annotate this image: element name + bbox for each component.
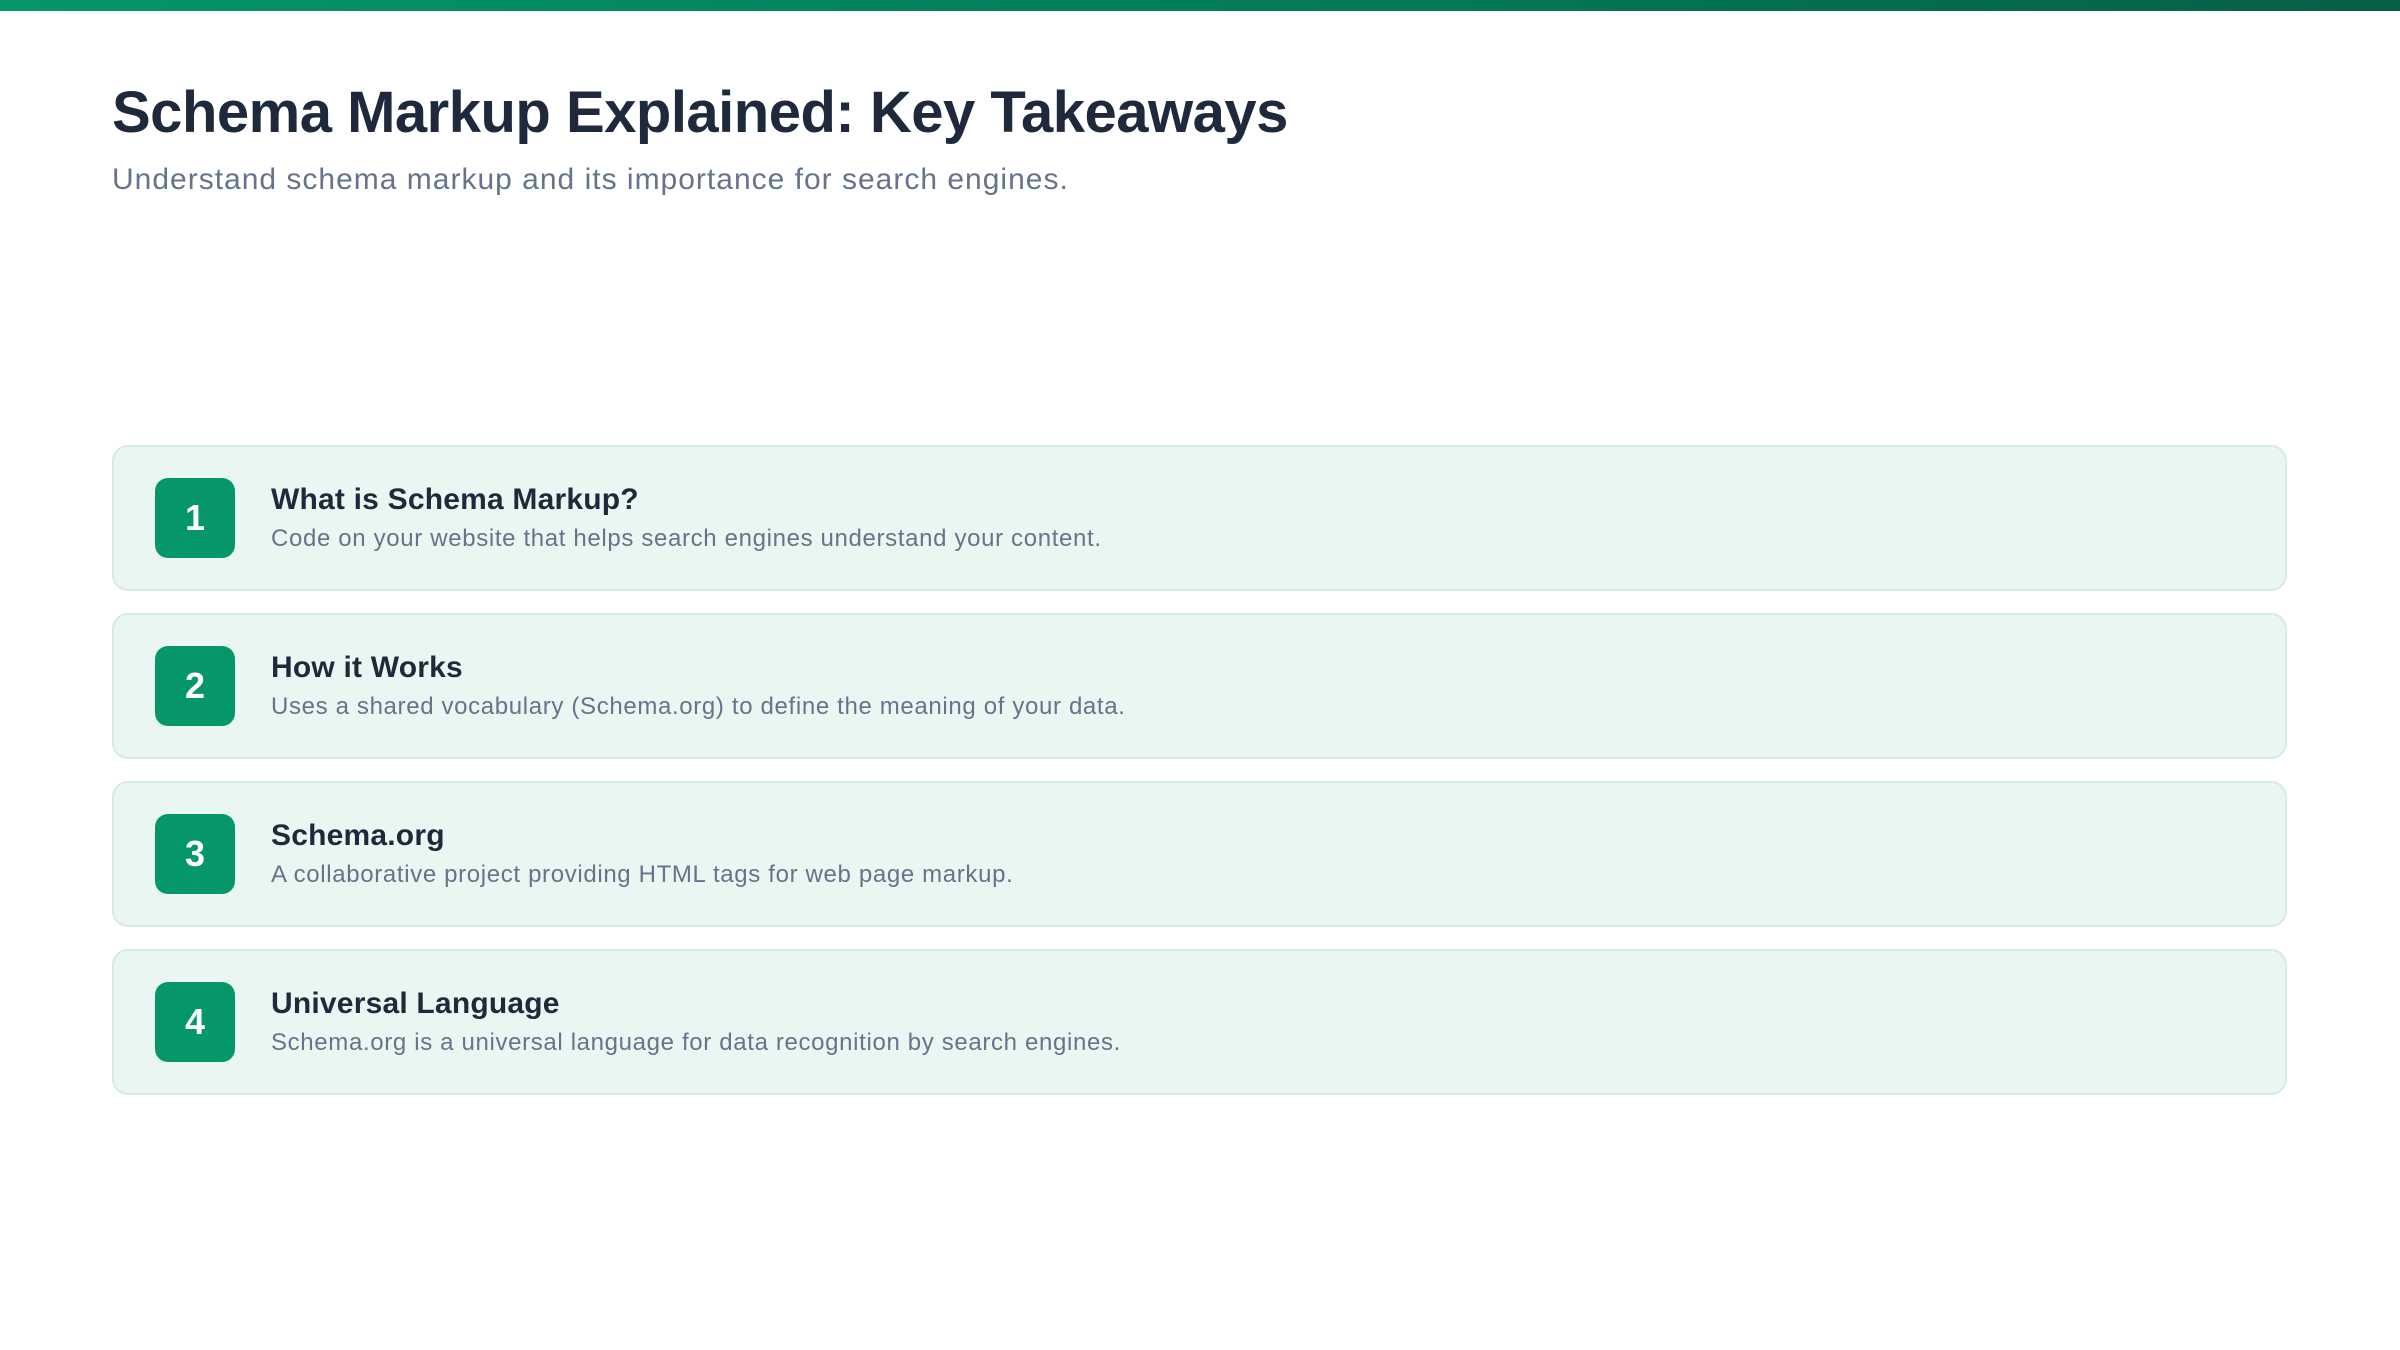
badge 2: [155, 646, 235, 726]
title: Schema Markup Explained: Key Takeaways: [112, 80, 1288, 145]
panel: card 4: [112, 949, 2287, 1095]
text: card 1: [271, 483, 1102, 552]
text: card 1: Code on your website that helps search engines understand your content.: [271, 525, 1102, 552]
text: card 3: A collaborative project providing HTML tags for web page markup.: [271, 861, 1013, 888]
badge 3: [155, 814, 235, 894]
text: card 2: [271, 651, 1126, 720]
text: card 4: Universal Language: [271, 987, 560, 1020]
badge 2: 2: [185, 665, 205, 706]
badge 4: 4: [185, 1001, 205, 1042]
text: card 4: [271, 987, 1121, 1056]
badge 1: [155, 478, 235, 558]
text: card 4: Schema.org is a universal language for data recognition by search engines.: [271, 1029, 1121, 1056]
panel: card 2: [112, 613, 2287, 759]
badge 3: 3: [185, 833, 205, 874]
badge 4: [155, 982, 235, 1062]
panel: card 1: [112, 445, 2287, 591]
subtitle: Understand schema markup and its importance for search engines.: [112, 163, 1069, 196]
panel: card 3: [112, 781, 2287, 927]
text: card 3: [271, 819, 1013, 888]
text: card 2: Uses a shared vocabulary (Schema.org) to define the meaning of your data.: [271, 693, 1126, 720]
text: card 1: What is Schema Markup?: [271, 483, 639, 516]
badge 1: 1: [185, 497, 205, 538]
text: card 3: Schema.org: [271, 819, 445, 852]
text: card 2: How it Works: [271, 651, 463, 684]
